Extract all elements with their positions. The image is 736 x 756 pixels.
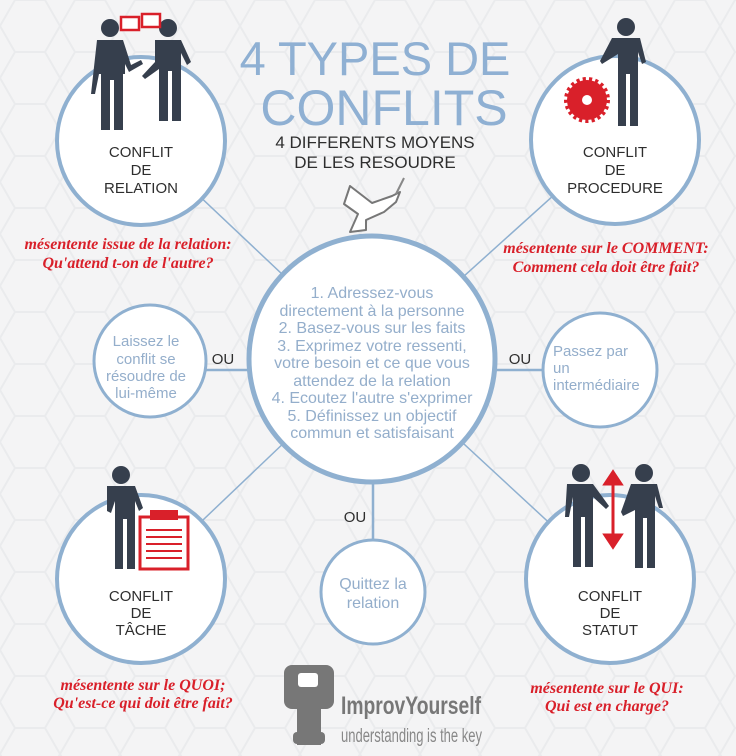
panel: left option — [94, 305, 206, 417]
central circle: commun et satisfaisant — [290, 425, 454, 442]
central circle — [249, 236, 495, 482]
panel: statut: CONFLIT — [578, 588, 642, 605]
title — [240, 32, 510, 136]
logo text: ImprovYourself — [341, 692, 482, 720]
subtitle — [275, 133, 475, 172]
panel: tache — [57, 466, 225, 663]
panel: procedure: PROCEDURE — [567, 180, 663, 197]
panel: left option: Laissez le — [113, 333, 179, 350]
caption: tache: mésentente sur le QUOI; — [61, 677, 225, 694]
title: CONFLITS — [260, 80, 508, 136]
panel: tache: DE — [131, 605, 151, 622]
panel: procedure — [531, 18, 699, 224]
panel: relation: RELATION — [104, 180, 178, 197]
logo text — [341, 692, 482, 747]
panel: relation: CONFLIT — [109, 144, 173, 161]
connector lines — [141, 140, 615, 579]
caption: statut: mésentente sur le QUI: — [530, 680, 684, 697]
icon: person with gear — [567, 18, 646, 126]
central circle: attendez de la relation — [293, 373, 451, 390]
panel: procedure: DE — [605, 162, 625, 179]
caption: statut — [530, 680, 684, 715]
logo text: understanding is the key — [341, 726, 482, 747]
central circle: 5. Définissez un objectif — [288, 408, 457, 425]
central circle: directement à la personne — [280, 303, 465, 320]
caption: relation: mésentente issue de la relation: — [24, 236, 232, 253]
label: OU bottom: OU — [344, 509, 366, 526]
panel: right option: intermédiaire — [553, 377, 640, 394]
caption: tache: Qu'est-ce qui doit être fait? — [53, 695, 233, 712]
panel: right option: Passez par — [553, 343, 628, 360]
panel: right option: un — [553, 360, 570, 377]
panel: statut — [526, 464, 694, 663]
caption: procedure — [503, 240, 709, 276]
caption: statut: Qui est en charge? — [545, 698, 669, 715]
panel: bottom option — [321, 540, 425, 644]
panel: statut: STATUT — [582, 622, 638, 639]
panel: relation: DE — [131, 162, 151, 179]
central circle: 4. Ecoutez l'autre s'exprimer — [272, 390, 473, 407]
panel: left option: lui-même — [115, 385, 177, 402]
subtitle: DE LES RESOUDRE — [294, 153, 456, 172]
panel: procedure: CONFLIT — [583, 144, 647, 161]
panel: statut: DE — [600, 605, 620, 622]
label: OU right: OU — [509, 351, 531, 368]
icon: two people with arrows — [565, 464, 663, 568]
panel: left option: conflit se — [116, 351, 176, 368]
caption: tache — [53, 677, 233, 712]
caption: procedure: Comment cela doit être fait? — [513, 259, 699, 276]
central circle: 3. Exprimez votre ressenti, — [277, 338, 467, 355]
title: 4 TYPES DE — [240, 32, 510, 85]
central circle: votre besoin et ce que vous — [274, 355, 470, 372]
caption: procedure: mésentente sur le COMMENT: — [503, 240, 709, 257]
panel: tache: TÂCHE — [116, 622, 166, 639]
icon: dove — [344, 178, 404, 232]
central circle: 2. Basez-vous sur les faits — [279, 320, 465, 337]
caption: relation: Qu'attend t-on de l'autre? — [42, 255, 214, 272]
caption: relation — [24, 236, 232, 272]
central circle: 1. Adressez-vous — [311, 285, 433, 302]
panel: left option: résoudre de — [106, 368, 186, 385]
label: OU left: OU — [212, 351, 234, 368]
icon: two people talking — [91, 14, 191, 130]
panel: bottom option: Quittez la — [339, 576, 407, 593]
panel: bottom option: relation — [347, 595, 399, 612]
panel: tache: CONFLIT — [109, 588, 173, 605]
panel: right option — [543, 313, 657, 427]
icon: person with clipboard — [107, 466, 188, 569]
subtitle: 4 DIFFERENTS MOYENS — [275, 133, 475, 152]
logo: key — [284, 665, 334, 745]
panel: relation — [57, 14, 225, 225]
